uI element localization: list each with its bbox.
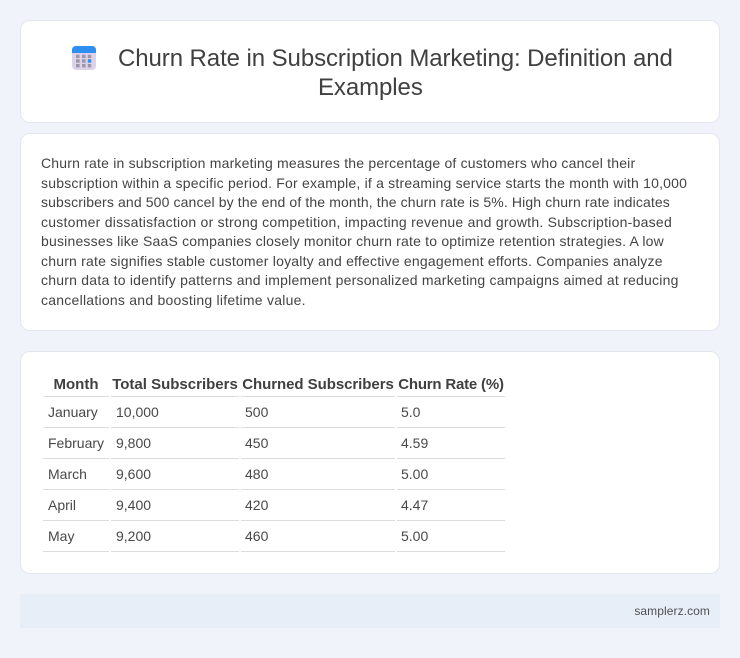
row: May: May xyxy=(48,528,74,544)
row: April: 4.47 xyxy=(401,497,428,513)
row: February: 9,800 xyxy=(116,435,151,451)
row: February: 4.59 xyxy=(401,435,428,451)
row: January: January xyxy=(48,404,98,420)
row: April: April xyxy=(48,497,76,513)
row: January xyxy=(43,404,505,428)
row: May: 5.00 xyxy=(401,528,428,544)
row: May: 460 xyxy=(245,528,268,544)
row: April: 9,400 xyxy=(116,497,151,513)
row: April xyxy=(43,497,505,521)
row: April: 420 xyxy=(245,497,268,513)
row: March: 9,600 xyxy=(116,466,151,482)
icon: calendar xyxy=(72,46,96,70)
row: March: March xyxy=(48,466,87,482)
text block: description: churn rate signifies stable customer loyalty and effective engagement efforts. Companies analyze xyxy=(41,253,663,269)
row: March: 5.00 xyxy=(401,466,428,482)
text block: description xyxy=(41,155,687,308)
title: Churn Rate in Subscription Marketing: Definition and xyxy=(118,45,673,72)
row: May: 9,200 xyxy=(116,528,151,544)
table header xyxy=(43,376,505,397)
row: March xyxy=(43,466,505,490)
footer text: samplerz.com xyxy=(634,604,710,618)
table header: Month xyxy=(54,376,98,393)
table header: Total Subscribers xyxy=(112,376,238,393)
row: May xyxy=(43,528,505,552)
text block: description: businesses like SaaS companies closely monitor churn rate to optimize retention strategies. A low xyxy=(41,233,664,249)
row: January: 5.0 xyxy=(401,404,420,420)
text block: description: customer dissatisfaction or strong competition, impacting revenue and growth. Subscription-based xyxy=(41,214,672,230)
row: February: 450 xyxy=(245,435,268,451)
row: March: 480 xyxy=(245,466,268,482)
title xyxy=(118,45,673,101)
panel: header xyxy=(20,20,720,123)
text block: description: subscription within a specific period. For example, if a streaming service starts the month with 10,000 xyxy=(41,175,687,191)
row: January: 10,000 xyxy=(116,404,159,420)
text block: description: cancellations and boosting lifetime value. xyxy=(41,292,306,308)
title: Examples xyxy=(318,74,423,101)
table: churn by month xyxy=(43,376,505,552)
row: February: February xyxy=(48,435,104,451)
text block: description: churn data to identify patterns and implement personalized marketing campaigns aimed at reducing xyxy=(41,272,679,288)
table header: Churn Rate (%) xyxy=(398,376,504,393)
row: February xyxy=(43,435,505,459)
row: January: 500 xyxy=(245,404,268,420)
text block: description: subscribers and 500 cancel by the end of the month, the churn rate is 5%. High churn rate indicates xyxy=(41,194,670,210)
panel: data table xyxy=(20,351,720,574)
panel: description xyxy=(20,133,720,331)
footer bar xyxy=(20,594,720,628)
table header: Churned Subscribers xyxy=(242,376,394,393)
text block: description: Churn rate in subscription marketing measures the percentage of customers who cancel their xyxy=(41,155,635,171)
